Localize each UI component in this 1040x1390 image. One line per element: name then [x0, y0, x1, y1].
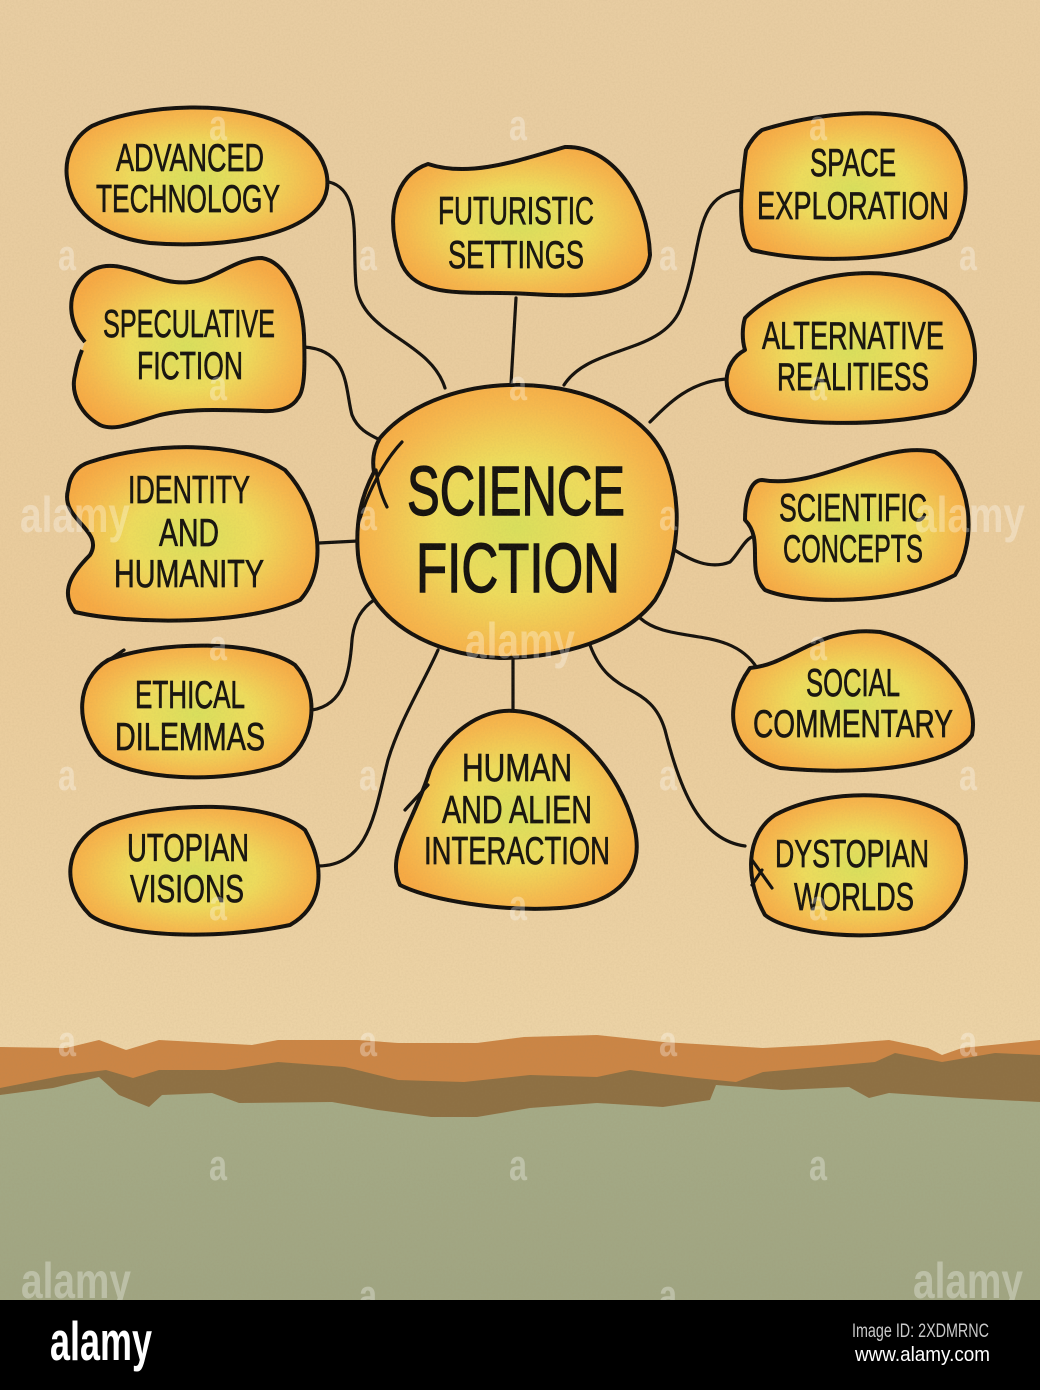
- watermarks: a: [659, 491, 677, 540]
- watermarks: a: [209, 881, 227, 930]
- footer logo: alamy: [50, 1310, 152, 1372]
- node: Advanced Technology: TECHNOLOGY: [96, 178, 280, 221]
- watermarks: a: [659, 1271, 677, 1320]
- watermarks: a: [58, 751, 76, 800]
- node: Social Commentary: COMMENTARY: [753, 703, 953, 746]
- watermarks: alamy: [465, 613, 575, 669]
- footer bar: [0, 1300, 1040, 1390]
- watermarks: a: [959, 1017, 977, 1066]
- node: Social Commentary: SOCIAL: [806, 662, 900, 705]
- node: Human and Alien Interaction: [396, 711, 637, 909]
- footer stock id: Image ID: 2XDMRNC: [852, 1321, 989, 1342]
- watermarks: a: [209, 361, 227, 410]
- watermarks: a: [359, 231, 377, 280]
- node: Human and Alien Interaction: INTERACTION: [424, 830, 610, 873]
- node: Utopian Visions: UTOPIAN: [127, 827, 249, 870]
- watermarks: a: [959, 751, 977, 800]
- node: Futuristic Settings: [393, 147, 650, 295]
- node: Dystopian Worlds: WORLDS: [794, 876, 914, 919]
- watermarks: a: [809, 101, 827, 150]
- watermarks: alamy: [20, 487, 130, 543]
- node: Dystopian Worlds: DYSTOPIAN: [775, 833, 929, 876]
- node: Alternative Realities: ALTERNATIVE: [762, 315, 944, 358]
- watermarks: a: [809, 361, 827, 410]
- node: Futuristic Settings: SETTINGS: [448, 234, 584, 277]
- node: Identity and Humanity: IDENTITY: [128, 469, 250, 512]
- node: Speculative Fiction: SPECULATIVE: [103, 303, 275, 346]
- watermarks: a: [659, 1017, 677, 1066]
- watermarks: a: [509, 101, 527, 150]
- node: Advanced Technology: [67, 107, 327, 244]
- node: Alternative Realities: [727, 273, 975, 423]
- watermarks: a: [959, 231, 977, 280]
- watermarks: a: [359, 1271, 377, 1320]
- connector lines: [304, 182, 760, 866]
- watermarks: a: [509, 881, 527, 930]
- watermarks: a: [509, 1141, 527, 1190]
- node: Space Exploration: [741, 113, 966, 259]
- watermarks: a: [58, 231, 76, 280]
- watermarks: a: [209, 101, 227, 150]
- watermarks: a: [509, 361, 527, 410]
- footer url: www.alamy.com: [854, 1344, 990, 1366]
- node: Speculative Fiction: FICTION: [137, 345, 243, 388]
- node: Ethical Dilemmas: [82, 646, 311, 777]
- node: Ethical Dilemmas: ETHICAL: [135, 674, 245, 717]
- watermarks: a: [359, 751, 377, 800]
- node: Human and Alien Interaction: AND ALIEN: [442, 789, 592, 832]
- node: Advanced Technology: ADVANCED: [116, 137, 264, 180]
- brown paper layer: [0, 1053, 1040, 1125]
- central node: Science Fiction: SCIENCE: [407, 452, 625, 530]
- node: Social Commentary: [733, 631, 973, 771]
- watermarks: a: [359, 1017, 377, 1066]
- watermarks: a: [809, 881, 827, 930]
- central node: Science Fiction: FICTION: [416, 529, 620, 607]
- node: Scientific Concepts: SCIENTIFIC: [779, 487, 927, 530]
- watermarks: a: [659, 751, 677, 800]
- watermarks: a: [209, 621, 227, 670]
- watermarks: a: [809, 621, 827, 670]
- node: Utopian Visions: VISIONS: [130, 868, 244, 911]
- node: Space Exploration: EXPLORATION: [757, 185, 949, 228]
- watermarks: a: [58, 1017, 76, 1066]
- node: Scientific Concepts: CONCEPTS: [783, 528, 923, 571]
- node: Space Exploration: SPACE: [810, 142, 896, 185]
- watermarks: a: [209, 1141, 227, 1190]
- node: Speculative Fiction: [71, 258, 304, 427]
- watermarks: a: [659, 231, 677, 280]
- watermarks: a: [359, 491, 377, 540]
- node: Utopian Visions: [70, 807, 319, 935]
- node: Dystopian Worlds: [751, 795, 966, 935]
- central node: Science Fiction: [357, 385, 677, 658]
- green paper layer: [0, 1077, 1040, 1300]
- node: Ethical Dilemmas: DILEMMAS: [115, 716, 265, 759]
- node: Identity and Humanity: AND: [159, 512, 219, 555]
- node: Identity and Humanity: HUMANITY: [114, 553, 264, 596]
- node: Alternative Realities: REALITIESS: [777, 356, 929, 399]
- node: Identity and Humanity: [67, 447, 318, 621]
- node: Futuristic Settings: FUTURISTIC: [438, 190, 594, 233]
- orange paper layer: [0, 1035, 1040, 1120]
- watermarks: alamy: [21, 1253, 131, 1309]
- watermarks: a: [809, 1141, 827, 1190]
- node: Human and Alien Interaction: HUMAN: [462, 747, 572, 790]
- node: Scientific Concepts: [745, 450, 969, 600]
